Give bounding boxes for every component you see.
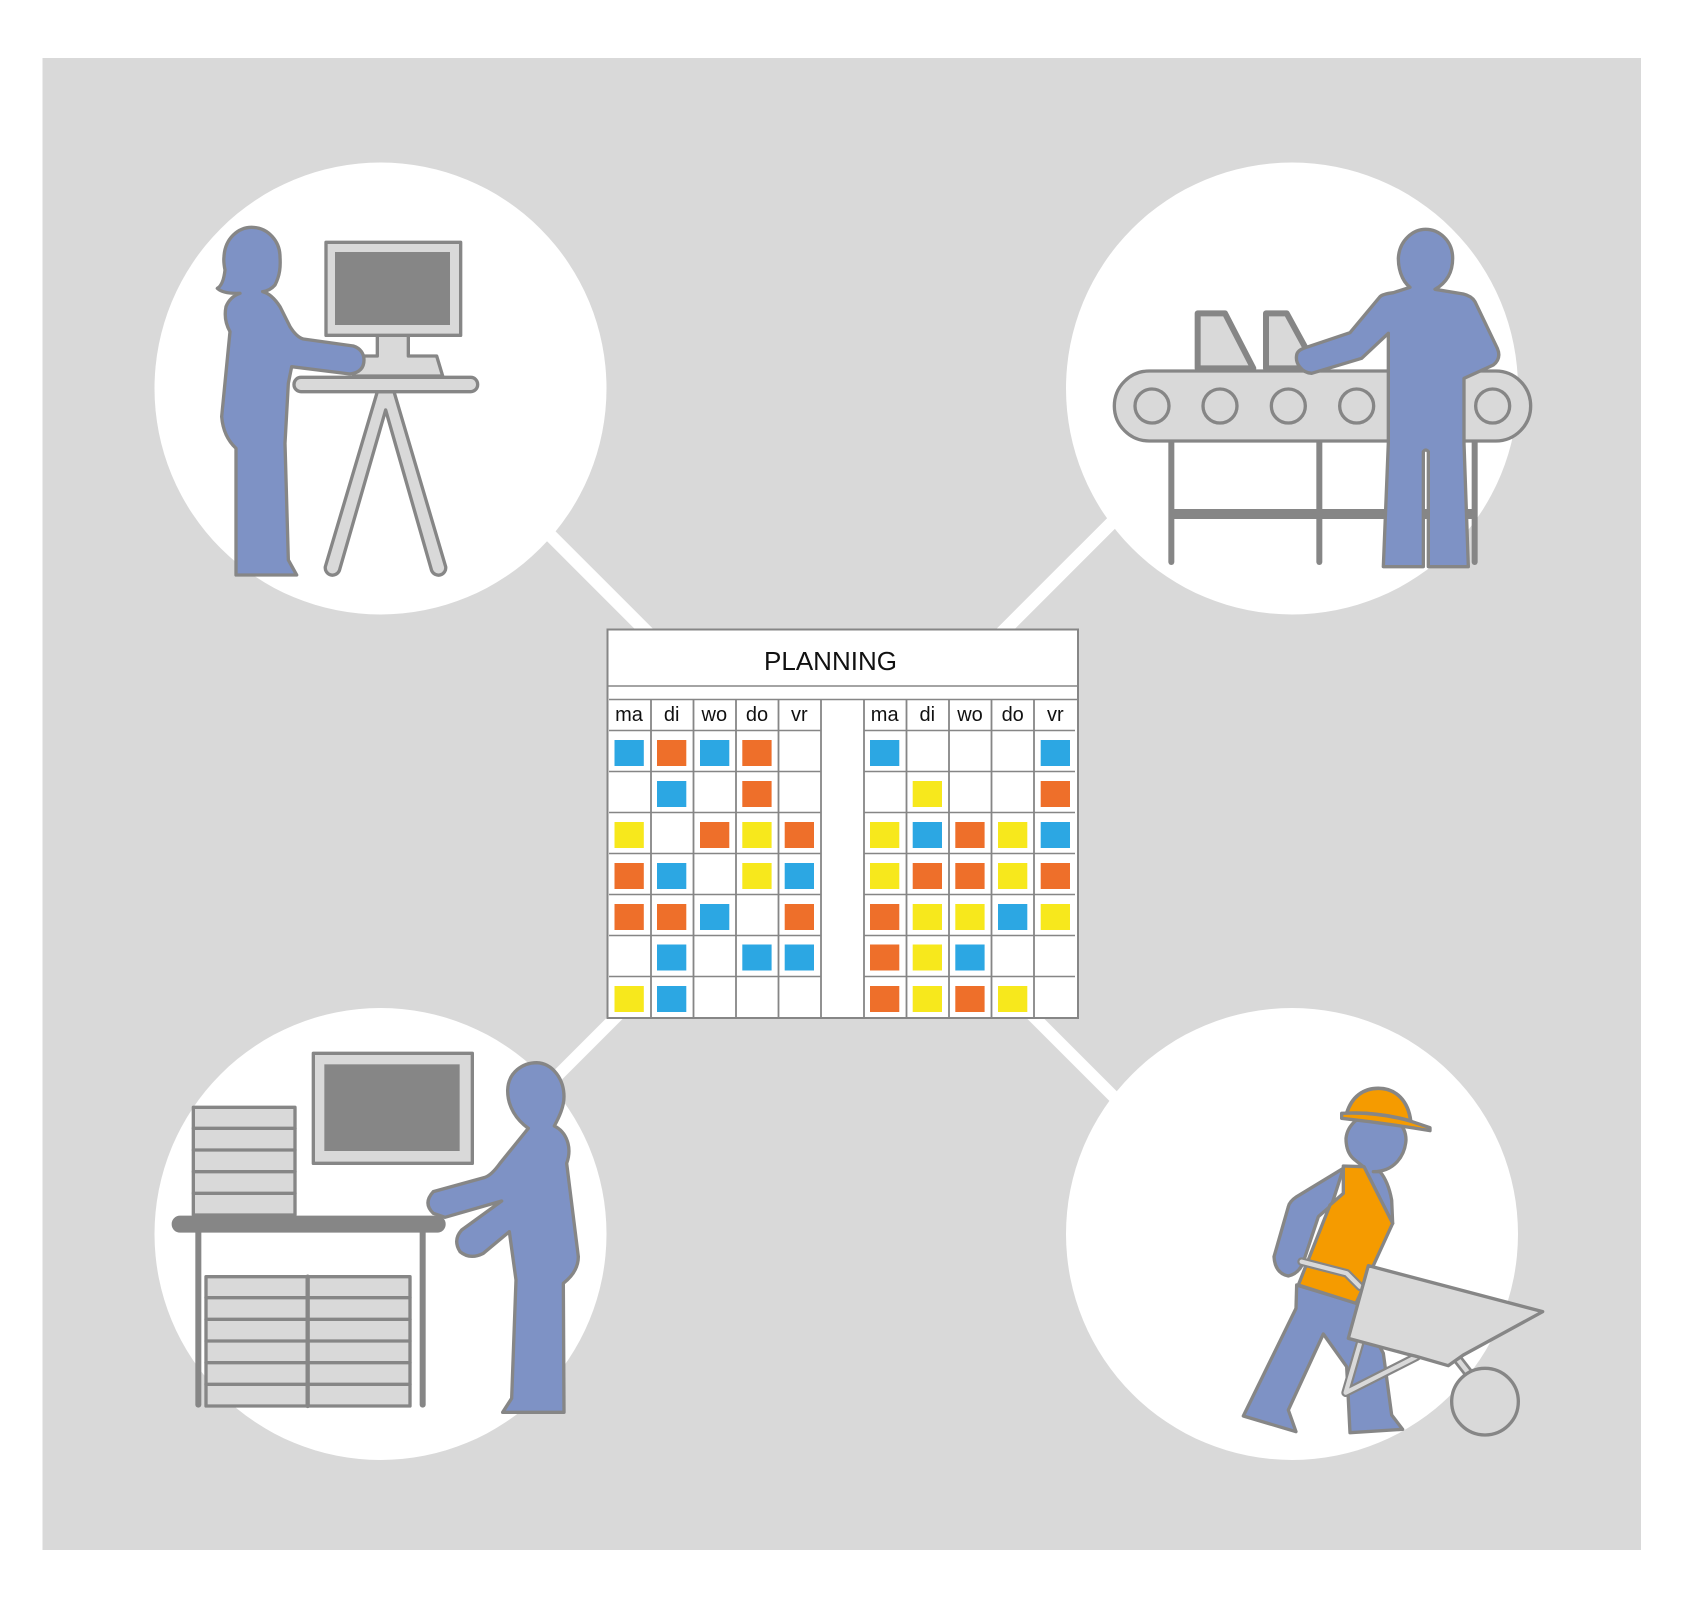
icon: product box xyxy=(1198,313,1253,368)
icon: desk top xyxy=(294,377,478,392)
icon: stacked trays xyxy=(193,1107,295,1215)
icon: monitor xyxy=(326,242,461,335)
scene: office worker at standing computer desk xyxy=(217,227,478,575)
icon: worker xyxy=(1243,1088,1430,1433)
day labels: second week: wo xyxy=(956,704,983,726)
icon: rollers xyxy=(1135,389,1510,423)
icon: wheelbarrow frame xyxy=(1346,1343,1417,1393)
day labels: second week xyxy=(871,704,1064,726)
icon: monitor stand xyxy=(353,335,443,376)
heading: planning: PLANNING xyxy=(764,646,897,676)
day labels: first week xyxy=(615,704,808,726)
panel: planning board xyxy=(607,630,1078,1018)
day labels: second week: ma xyxy=(871,704,899,726)
icon: woman xyxy=(217,227,364,575)
planning tasks: blue xyxy=(614,740,1070,1012)
circle: top right xyxy=(1066,162,1518,614)
icon: man xyxy=(428,1063,578,1412)
icon: wall monitor xyxy=(313,1053,472,1163)
day labels: second week: di xyxy=(920,704,935,726)
day labels: first week: di xyxy=(664,704,679,726)
circle: top left xyxy=(154,162,606,614)
day labels: first week: wo xyxy=(701,704,727,726)
board background xyxy=(608,630,1078,1018)
board grid xyxy=(607,686,1078,1018)
icon: drawers xyxy=(206,1277,410,1406)
icon: conveyor belt xyxy=(1114,371,1531,441)
planning tasks: orange xyxy=(614,740,1070,1012)
scene: worker at storage desk xyxy=(172,1053,578,1412)
icon: conveyor legs xyxy=(1171,441,1477,562)
scene: construction worker with wheelbarrow xyxy=(1243,1088,1543,1435)
worker legs xyxy=(1243,1285,1403,1433)
day labels: first week: ma xyxy=(615,704,644,726)
circle: bottom right xyxy=(1066,1008,1518,1460)
icon: desk top xyxy=(172,1216,446,1233)
icon: product box xyxy=(1266,313,1317,368)
circle: bottom left xyxy=(154,1008,606,1460)
scene: worker at conveyor belt xyxy=(1114,229,1531,567)
icon: wheelbarrow handle xyxy=(1302,1262,1360,1287)
connector lines xyxy=(530,514,1125,1108)
day labels: first week: vr xyxy=(791,704,808,726)
day labels: second week: vr xyxy=(1047,704,1064,726)
worker torso and head xyxy=(1346,1113,1406,1223)
day labels: second week: do xyxy=(1002,704,1024,726)
icon: wheelbarrow wheel xyxy=(1452,1360,1518,1435)
worker helmet brim xyxy=(1342,1113,1430,1131)
icon: desk legs xyxy=(325,392,446,575)
day labels: first week: do xyxy=(746,704,768,726)
icon: desk legs xyxy=(198,1233,423,1405)
icon: man xyxy=(1296,229,1499,567)
worker back arm xyxy=(1274,1168,1343,1276)
icon: wheelbarrow tub xyxy=(1348,1266,1543,1366)
worker helmet dome xyxy=(1347,1088,1411,1121)
planning tasks: yellow xyxy=(614,781,1070,1012)
worker vest xyxy=(1298,1166,1393,1303)
